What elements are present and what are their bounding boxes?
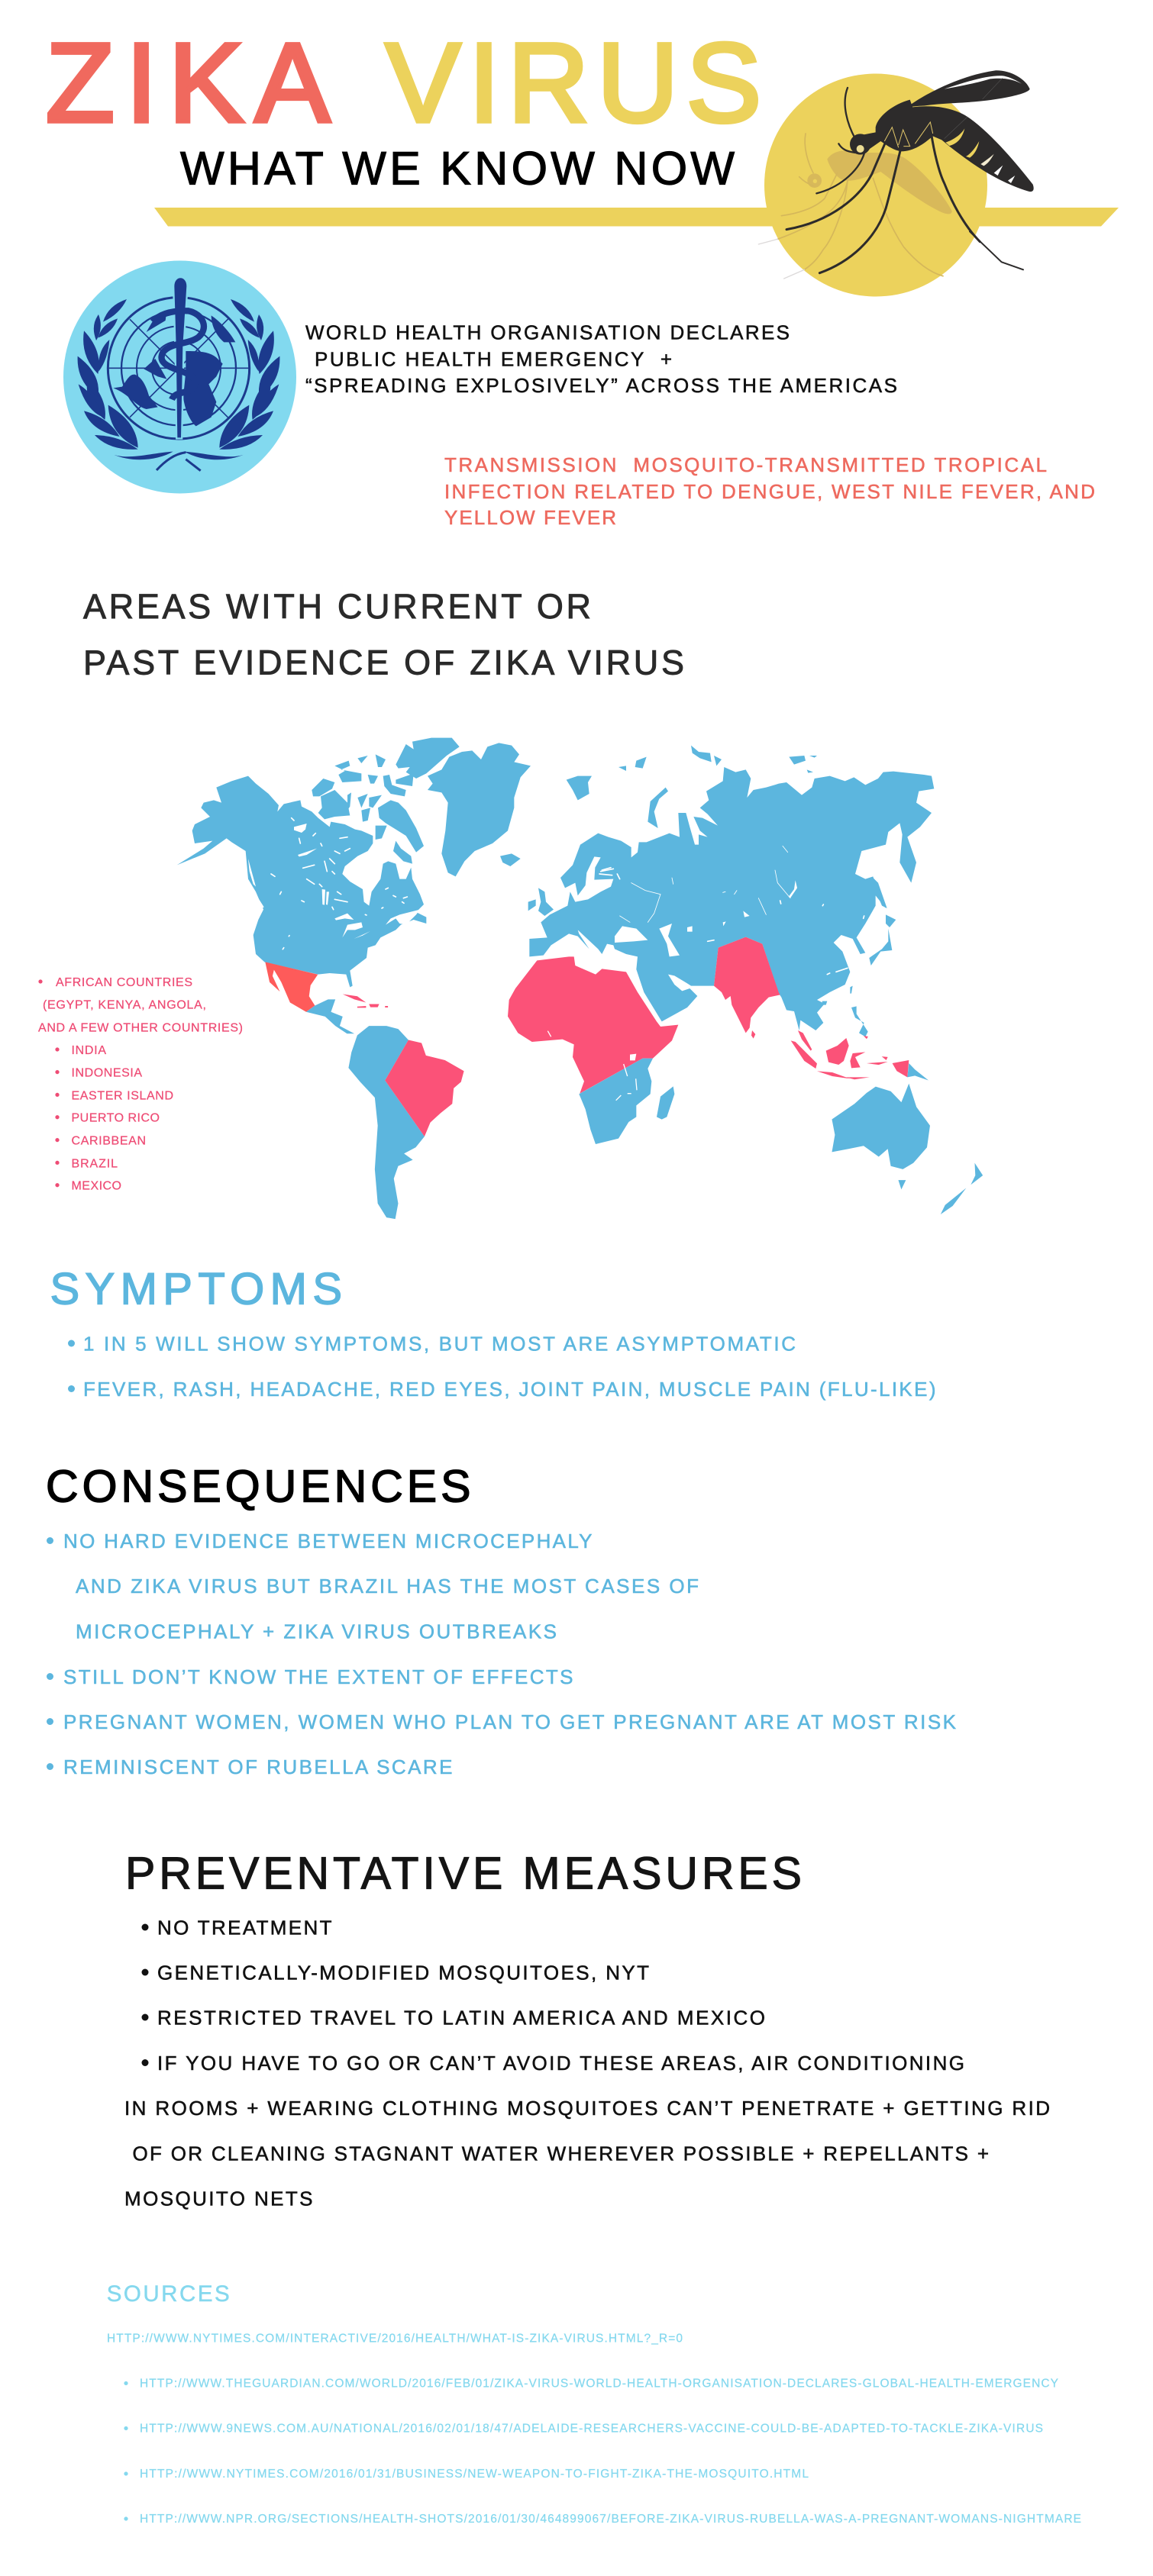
British Isles: [528, 888, 554, 916]
map: eastern Indonesia and Oceania: [832, 1036, 983, 1214]
North American mainland: [177, 776, 426, 987]
transmission text: YELLOW FEVER: [444, 506, 616, 529]
source links list: HTTP://WWW.NPR.ORG/SECTIONS/HEALTH-SHOTS/2016/01/30/464899067/BEFORE-ZIKA-VIRUS-RUBELLA-WAS-A-PREGNANT-WOMANS-NIGHTMARE: [140, 2513, 1081, 2526]
Greenland: [428, 743, 531, 876]
abdomen stripes and wing details: [884, 76, 1022, 183]
mosquito head and eye: [850, 134, 870, 155]
map legend list: INDONESIA: [72, 1067, 142, 1080]
icon: mosquito with shadow: [758, 70, 1034, 279]
map legend list: MEXICO: [72, 1180, 121, 1193]
WHO declaration text: “SPREADING EXPLOSIVELY” ACROSS THE AMERICAS: [305, 374, 897, 397]
Madagascar: [657, 1086, 674, 1120]
heading: areas with evidence: AREAS WITH CURRENT OR: [83, 587, 591, 626]
transmission text: TRANSMISSION MOSQUITO-TRANSMITTED TROPICAL: [444, 453, 1047, 476]
preventative measures list: IN ROOMS + WEARING CLOTHING MOSQUITOES CAN’T PENETRATE + GETTING RID: [124, 2097, 1050, 2120]
inland seas: [615, 880, 797, 956]
icon: World Health Organization emblem: [63, 261, 296, 493]
emblem staff and serpent: [147, 278, 204, 437]
scattered lake specks: [271, 818, 407, 949]
title: ZIKA: ZIKA: [46, 21, 330, 146]
map legend list: EASTER ISLAND: [72, 1089, 173, 1102]
preventative measures list: [124, 1916, 1050, 2210]
Mexico highlighted: [265, 962, 318, 1012]
Sri Lanka highlighted: [751, 1030, 755, 1039]
map legend list: PUERTO RICO: [72, 1112, 160, 1125]
heading: symptoms: SYMPTOMS: [50, 1264, 342, 1314]
Caribbean highlighted: [343, 994, 388, 1008]
map: North America, Greenland and British Isles: [177, 738, 554, 987]
Sakhalin and Japan: [869, 878, 896, 966]
Australia: [832, 1084, 930, 1169]
Brazil highlighted: [385, 1040, 464, 1136]
subtitle: what we know now: WHAT WE KNOW NOW: [180, 142, 735, 194]
WHO declaration text: WORLD HEALTH ORGANISATION DECLARES: [305, 321, 790, 343]
title: VIRUS: VIRUS: [386, 21, 761, 146]
Indonesia west highlighted: [791, 1030, 865, 1078]
consequences list: PREGNANT WOMEN, WOMEN WHO PLAN TO GET PREGNANT ARE AT MOST RISK: [63, 1710, 957, 1733]
source links list: [107, 2333, 1081, 2526]
consequences list: NO HARD EVIDENCE BETWEEN MICROCEPHALY: [63, 1530, 593, 1552]
consequences list: STILL DON’T KNOW THE EXTENT OF EFFECTS: [63, 1665, 573, 1688]
WHO declaration text: PUBLIC HEALTH EMERGENCY +: [315, 347, 672, 370]
source links list: HTTP://WWW.NYTIMES.COM/INTERACTIVE/2016/HEALTH/WHAT-IS-ZIKA-VIRUS.HTML?_R=0: [107, 2333, 683, 2345]
preventative measures list: MOSQUITO NETS: [124, 2188, 313, 2210]
consequences list: [47, 1530, 957, 1778]
India highlighted: [714, 937, 780, 1033]
heading: areas with evidence: [83, 587, 684, 682]
Philippines, Hainan and Taiwan: [822, 986, 868, 1037]
map: Africa, India and western Indonesia: [508, 937, 868, 1144]
heading: sources: SOURCES: [107, 2281, 230, 2307]
emblem ribbons: [112, 452, 245, 471]
panel: preventative measures: [124, 1849, 1050, 2210]
source links list: HTTP://WWW.NYTIMES.COM/2016/01/31/BUSINESS/NEW-WEAPON-TO-FIGHT-ZIKA-THE-MOSQUITO.HTML: [140, 2468, 809, 2481]
map: Central and South America: [265, 962, 464, 1219]
rivers and small lakes: [599, 846, 864, 975]
transmission text: INFECTION RELATED TO DENGUE, WEST NILE FEVER, AND: [444, 480, 1095, 503]
New Zealand: [941, 1163, 983, 1214]
map legend list: AND A FEW OTHER COUNTRIES): [38, 1021, 243, 1035]
header: title and mosquito illustration: [46, 21, 1119, 296]
Tasmania: [898, 1180, 906, 1189]
preventative measures list: OF OR CLEANING STAGNANT WATER WHEREVER POSSIBLE + REPELLANTS +: [133, 2142, 989, 2165]
emblem globe rings: [108, 298, 250, 439]
map legend list: AFRICAN COUNTRIES: [56, 976, 192, 989]
map legend list: CARIBBEAN: [72, 1135, 146, 1148]
WHO section: [63, 261, 1095, 529]
mosquito body: [863, 100, 1034, 192]
preventative measures list: IF YOU HAVE TO GO OR CAN’T AVOID THESE AREAS, AIR CONDITIONING: [157, 2052, 964, 2075]
Eurasian landmass: [529, 767, 934, 1030]
Iceland: [500, 853, 521, 866]
consequences list: AND ZIKA VIRUS BUT BRAZIL HAS THE MOST CASES OF: [76, 1575, 699, 1598]
symptoms list: FEVER, RASH, HEADACHE, RED EYES, JOINT PAIN, MUSCLE PAIN (FLU-LIKE): [83, 1378, 936, 1401]
Arctic archipelago: [312, 738, 460, 864]
map legend list: (EGYPT, KENYA, ANGOLA,: [43, 999, 206, 1012]
African lakes: [547, 1031, 637, 1101]
yellow circle behind mosquito: [764, 73, 987, 296]
symptoms list: 1 IN 5 WILL SHOW SYMPTOMS, BUT MOST ARE ASYMPTOMATIC: [83, 1333, 796, 1356]
emblem continents: [113, 315, 235, 426]
mosquito legs: [786, 88, 1023, 273]
source links list: HTTP://WWW.THEGUARDIAN.COM/WORLD/2016/FEB/01/ZIKA-VIRUS-WORLD-HEALTH-ORGANISATION-DECLARES-GLOBAL-HEALTH-EMERGENCY: [140, 2378, 1058, 2391]
consequences list: REMINISCENT OF RUBELLA SCARE: [63, 1755, 452, 1778]
source links list: HTTP://WWW.9NEWS.COM.AU/NATIONAL/2016/02/01/18/47/ADELAIDE-RESEARCHERS-VACCINE-COULD-BE-ADAPTED-TO-TACKLE-ZIKA-VIRUS: [140, 2423, 1043, 2436]
symptoms list: [68, 1333, 936, 1401]
eastern Indonesia highlighted: [845, 1036, 909, 1079]
emblem laurel wreath: [78, 299, 279, 450]
heading: areas with evidence: PAST EVIDENCE OF ZIKA VIRUS: [83, 643, 684, 682]
WHO declaration text: [305, 321, 897, 397]
mosquito shadow: [758, 134, 952, 279]
preventative measures list: NO TREATMENT: [157, 1916, 332, 1939]
heading: consequences: CONSEQUENCES: [46, 1461, 470, 1511]
Southern Africa: [579, 1059, 653, 1144]
preventative measures list: RESTRICTED TRAVEL TO LATIN AMERICA AND MEXICO: [157, 2007, 765, 2030]
world map: [177, 738, 983, 1219]
map legend list: BRAZIL: [72, 1157, 118, 1170]
Africa highlighted: [508, 956, 678, 1094]
Canadian and Great Lakes: [248, 824, 420, 939]
map legend list: INDIA: [72, 1044, 106, 1057]
transmission text: [444, 453, 1095, 529]
heading: preventative measures: PREVENTATIVE MEASURES: [125, 1849, 802, 1899]
South America: [348, 1026, 425, 1219]
panel: sources: [107, 2281, 1081, 2526]
consequences list: MICROCEPHALY + ZIKA VIRUS OUTBREAKS: [76, 1620, 557, 1643]
Arctic islands: [567, 746, 817, 828]
mosquito wing: [907, 70, 1030, 109]
map: Eurasia: [529, 746, 934, 1030]
yellow banner stripe: [154, 208, 1119, 226]
Central America: [306, 999, 354, 1033]
panel: consequences: [46, 1461, 957, 1778]
preventative measures list: GENETICALLY-MODIFIED MOSQUITOES, NYT: [157, 1962, 649, 1984]
map legend list: [38, 976, 243, 1193]
Papua New Guinea: [907, 1063, 929, 1081]
panel: symptoms: [50, 1264, 936, 1401]
